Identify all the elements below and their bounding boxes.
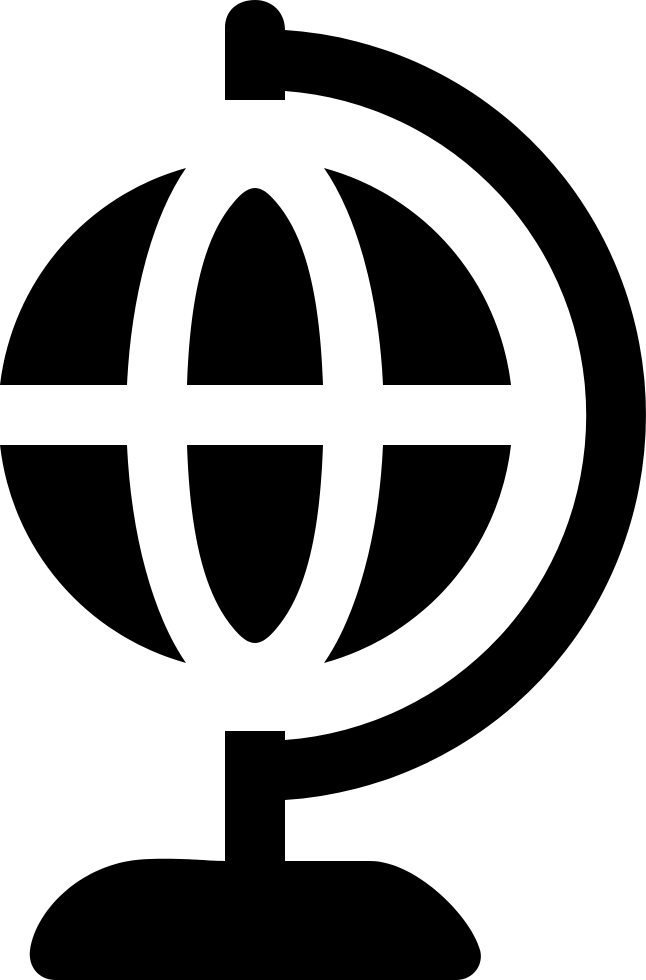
stand: arc with top cap (225, 0, 646, 865)
globe: bottom centre segment (187, 445, 323, 643)
globe: bottom left segment (0, 445, 186, 663)
stand: base (30, 859, 481, 980)
globe: top centre segment (187, 188, 323, 385)
globe: top left segment (0, 168, 186, 385)
globe: top right segment (324, 168, 511, 385)
globe: bottom right segment (324, 445, 511, 663)
